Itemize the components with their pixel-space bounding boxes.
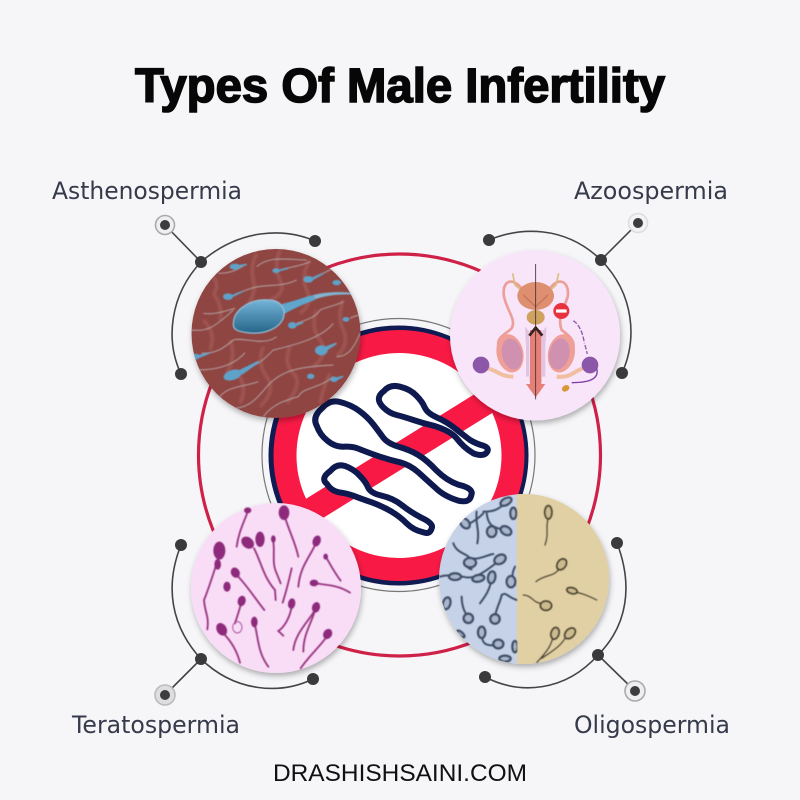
connector: teratospermia (155, 539, 319, 705)
circle: asthenospermia image (192, 249, 360, 418)
label: teratospermia: Teratospermia (71, 711, 240, 739)
connector: oligospermia (479, 537, 645, 701)
footer website: DRASHISHSAINI.COM (273, 760, 527, 787)
connector: azoospermia (483, 214, 648, 379)
connector: asthenospermia (156, 216, 321, 380)
circle: oligospermia image (439, 490, 617, 670)
label: asthenospermia: Asthenospermia (52, 177, 242, 205)
label: azoospermia: Azoospermia (574, 177, 728, 205)
label: oligospermia: Oligospermia (574, 711, 730, 739)
bladder (517, 282, 554, 310)
outer crimson ring (198, 254, 600, 656)
circle: teratospermia image (191, 503, 361, 673)
circle: azoospermia diagram (450, 250, 620, 420)
icon: no-entry sign (553, 303, 569, 319)
title: Types Of Male Infertility (135, 60, 665, 113)
central icon: no sperm prohibition sign (262, 318, 535, 592)
